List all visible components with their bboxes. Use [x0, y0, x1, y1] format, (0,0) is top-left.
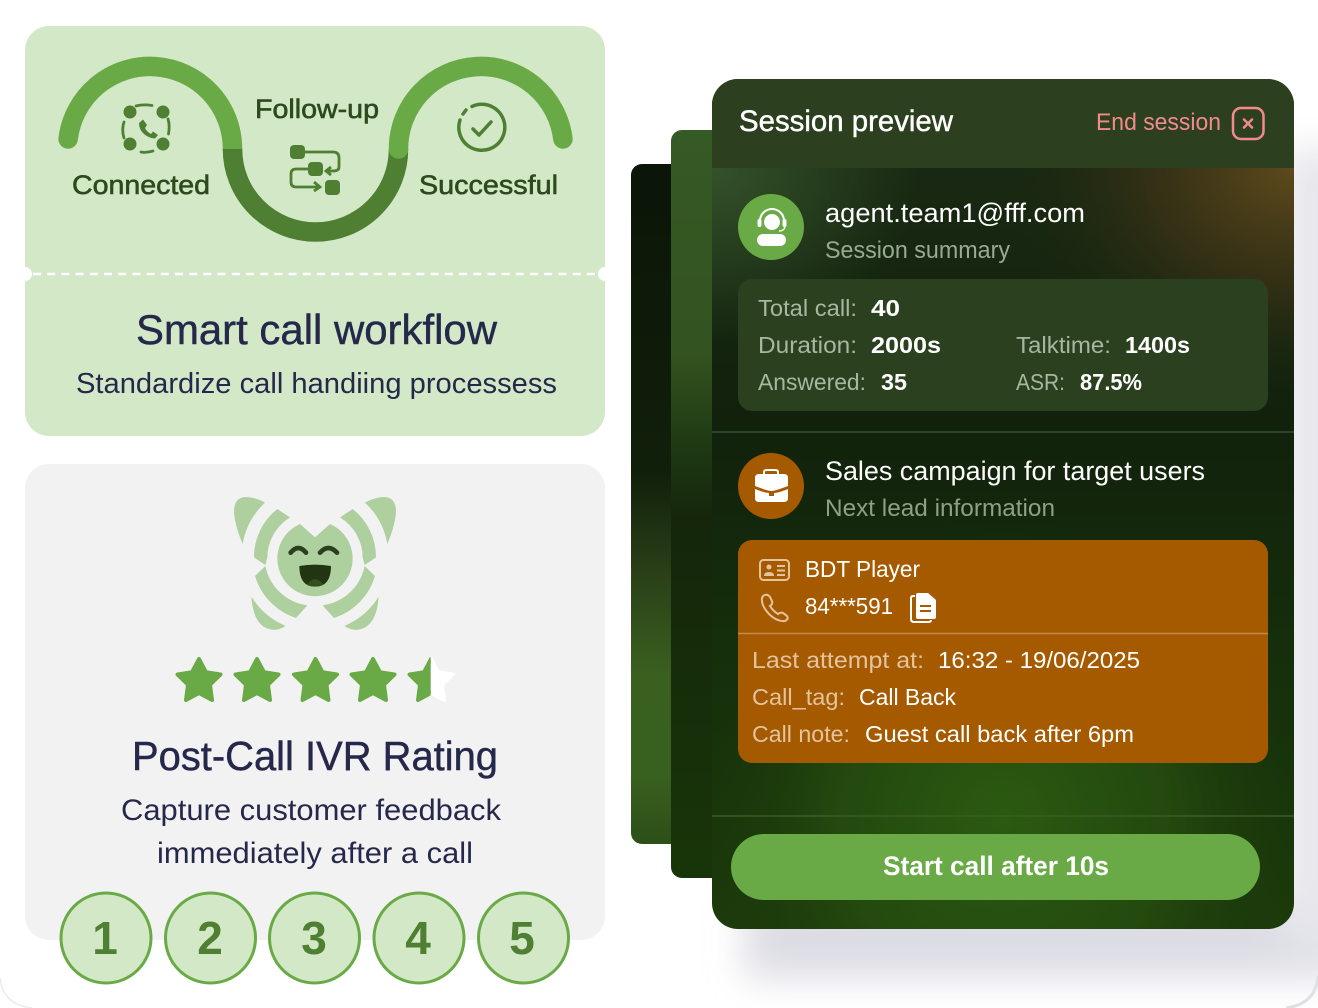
summary stats box: 1400s	[1125, 332, 1190, 358]
icon: agent avatar	[738, 194, 804, 260]
summary stats box: 40	[871, 295, 900, 321]
summary stats box: 35	[881, 369, 907, 395]
summary stats box: ASR:	[1016, 369, 1065, 395]
icon: follow-up flow	[290, 145, 340, 195]
heading: smart call workflow: Smart call workflow	[136, 306, 498, 353]
rating options 1 to 5: 2	[197, 912, 223, 964]
action: end session	[1096, 108, 1264, 139]
rating stars: 4.5 of 5	[178, 659, 452, 700]
panel shadow	[745, 150, 1318, 978]
label: connected: Connected	[72, 170, 210, 200]
stacked back card: green	[671, 130, 791, 878]
icon: id card	[760, 560, 789, 580]
lead details card: 84***591	[805, 593, 893, 619]
lead details card: Call_tag:	[752, 684, 845, 710]
subtitle: rating line 2: immediately after a call	[157, 837, 473, 870]
icon: smiling mascot	[234, 497, 396, 630]
lead details card: 16:32 - 19/06/2025	[938, 647, 1140, 673]
icon: connected	[123, 105, 170, 152]
heading: session preview: Session preview	[739, 105, 953, 138]
stacked back card: dark	[631, 164, 751, 844]
button: start call	[731, 834, 1260, 900]
wave: workflow path	[68, 66, 563, 232]
panel: post-call IVR rating	[25, 464, 605, 983]
label: successful: Successful	[419, 170, 558, 200]
summary stats box: 2000s	[871, 332, 941, 358]
lead details card	[738, 540, 1268, 763]
summary stats box: Total call:	[758, 295, 857, 321]
lead details card: Last attempt at:	[752, 647, 924, 673]
icon: copy	[911, 593, 936, 622]
lead details card: Call Back	[859, 684, 956, 710]
button: start call: Start call after 10s	[883, 851, 1109, 881]
panel: session preview	[712, 79, 1294, 929]
summary stats box: 87.5%	[1080, 369, 1142, 395]
text: next lead information: Next lead information	[825, 495, 1055, 522]
icon: success check	[459, 104, 505, 150]
subtitle: rating line 1: Capture customer feedback	[121, 794, 502, 827]
text: session summary: Session summary	[825, 237, 1010, 264]
action: end session: End session	[1096, 109, 1221, 136]
label: follow-up: Follow-up	[255, 94, 379, 124]
text: campaign name: Sales campaign for target users	[825, 456, 1205, 486]
lead details card: Call note:	[752, 721, 850, 747]
rating options 1 to 5: 5	[509, 912, 535, 964]
summary stats box: Answered:	[758, 369, 866, 395]
panel: smart call workflow	[25, 26, 605, 436]
lead details card: Guest call back after 6pm	[865, 721, 1134, 747]
text: agent email: agent.team1@fff.com	[825, 198, 1085, 228]
rating options 1 to 5: 1	[92, 912, 118, 964]
summary stats box	[738, 279, 1268, 411]
rating options 1 to 5	[61, 893, 568, 983]
icon: campaign briefcase	[738, 453, 804, 519]
rating options 1 to 5: 4	[405, 912, 431, 964]
icon: phone	[762, 595, 788, 621]
summary stats box: Talktime:	[1016, 332, 1111, 358]
subtitle: workflow: Standardize call handiing processess	[76, 368, 557, 400]
lead details card: BDT Player	[805, 556, 920, 582]
heading: post-call IVR rating: Post-Call IVR Rating	[132, 733, 498, 779]
summary stats box: Duration:	[758, 332, 857, 358]
rating options 1 to 5: 3	[301, 912, 327, 964]
